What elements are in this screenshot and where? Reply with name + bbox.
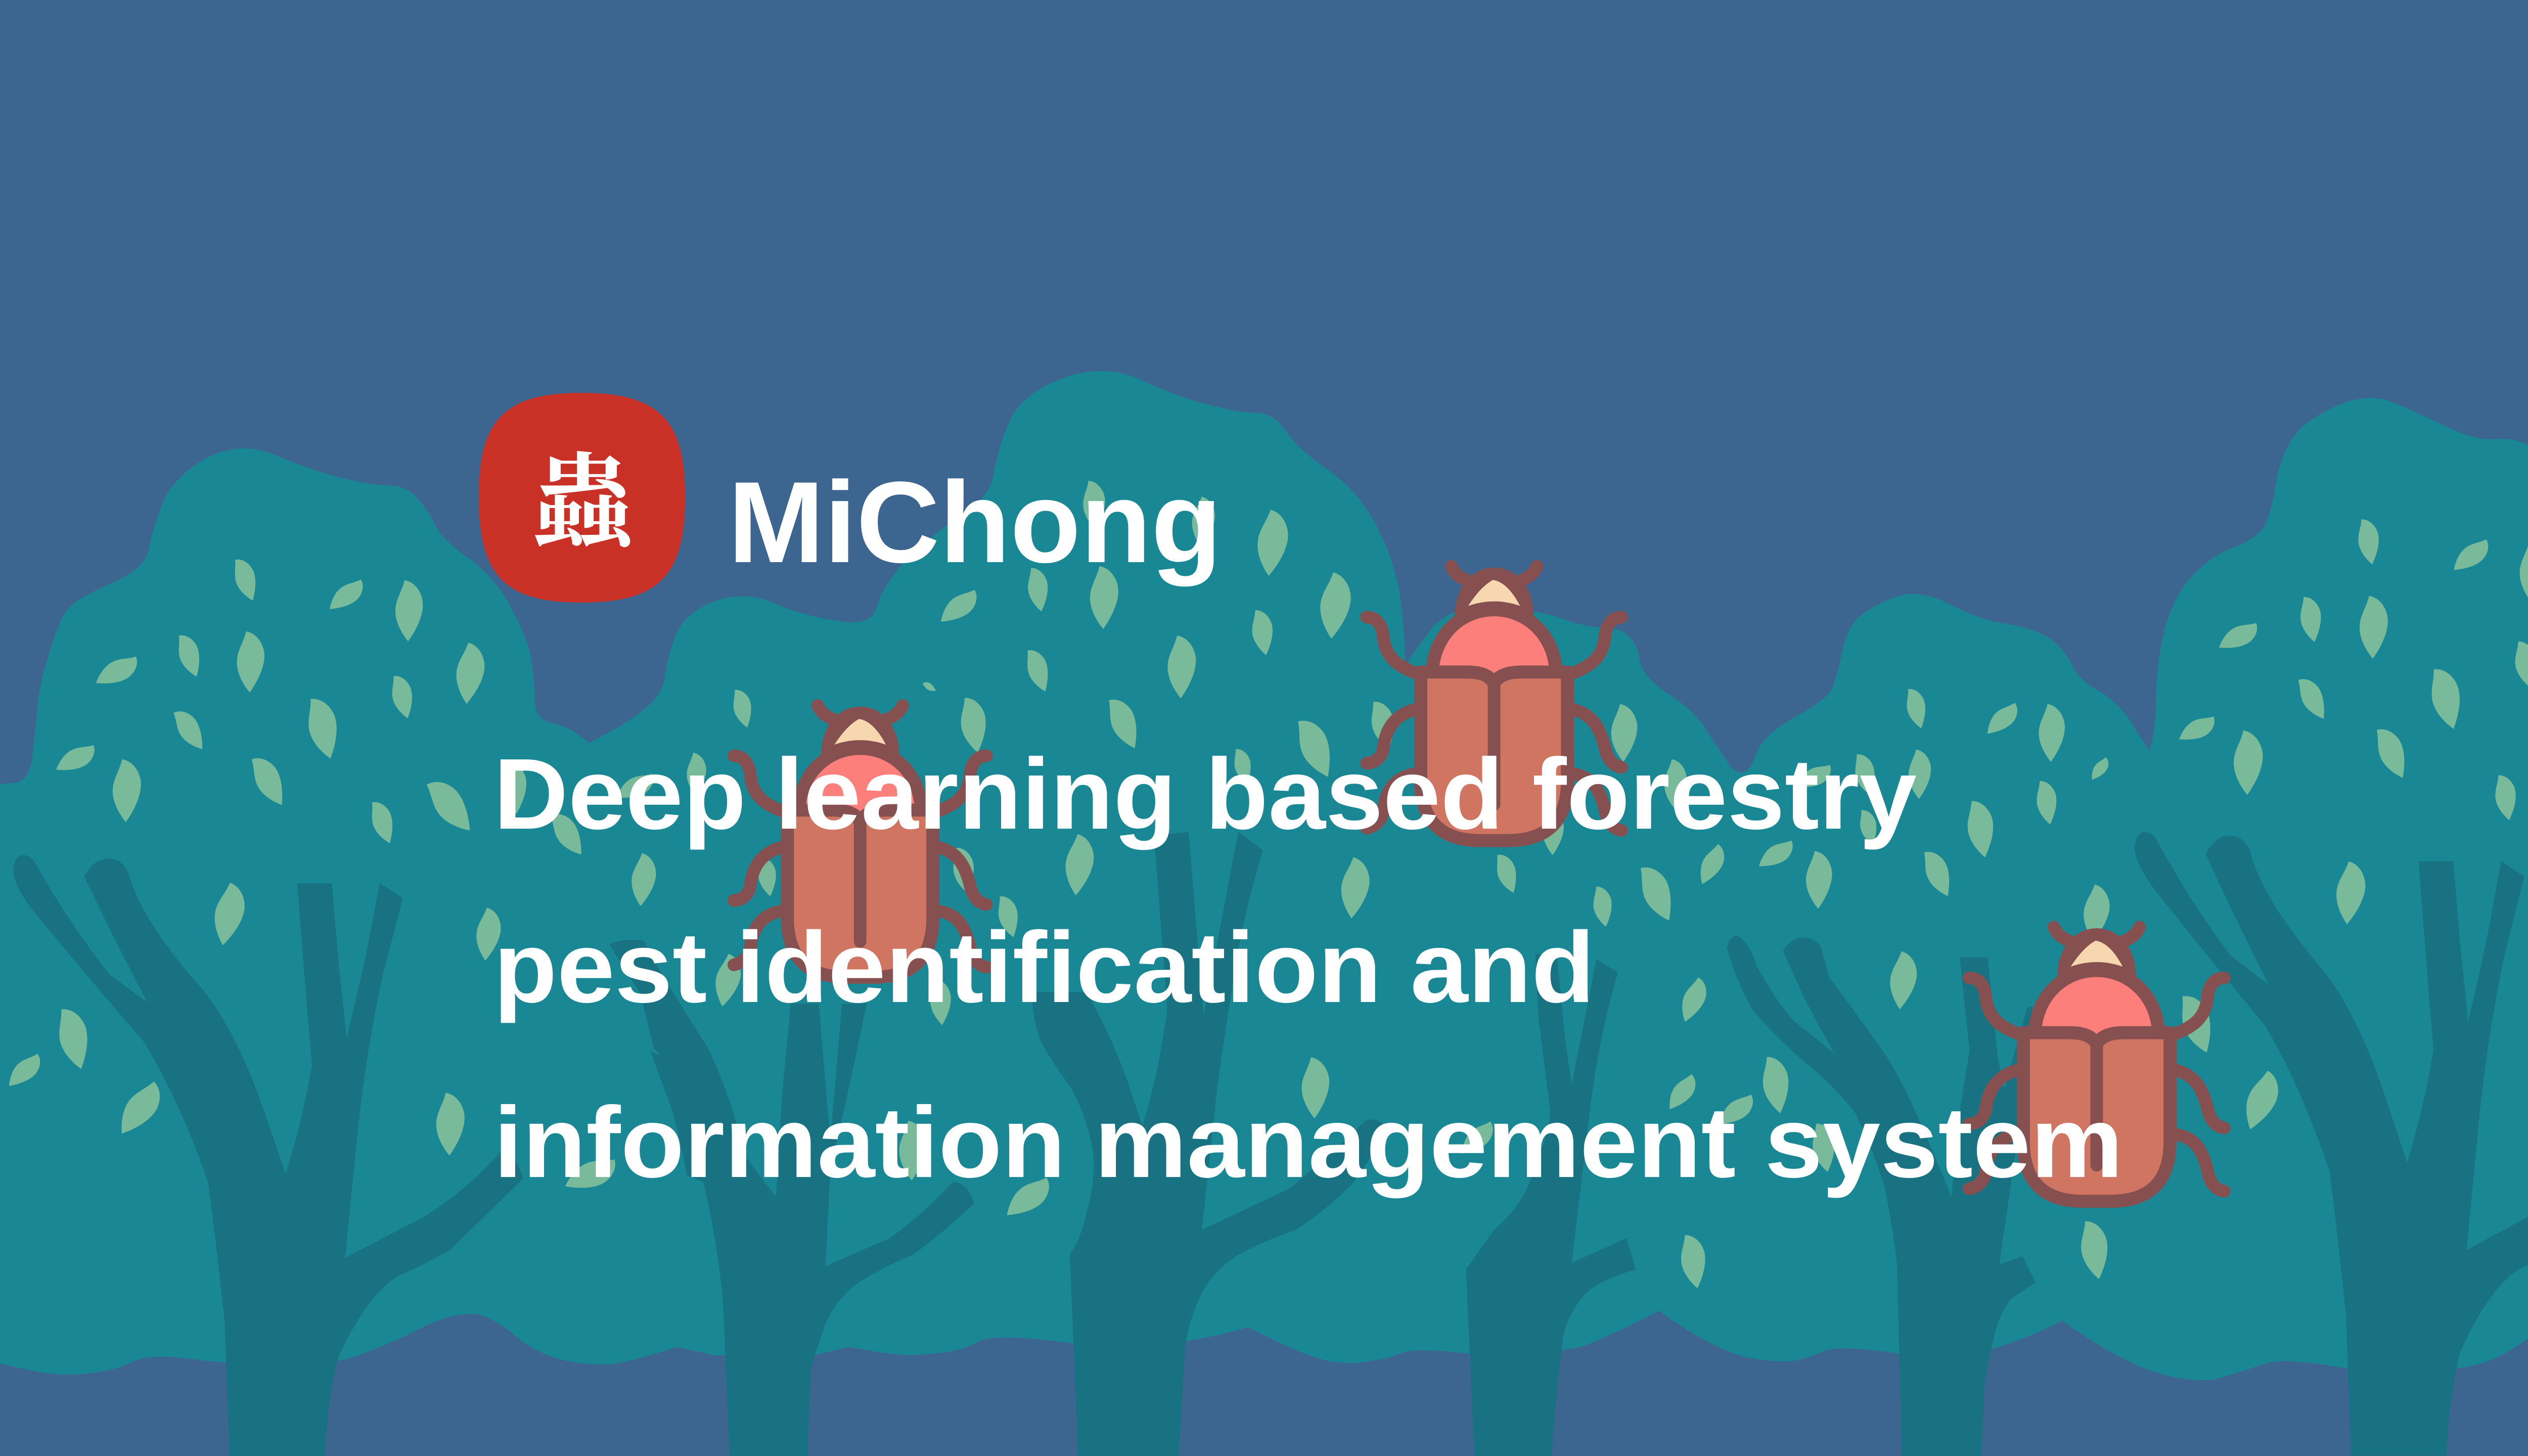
trunk: left tree xyxy=(13,855,523,1456)
leaves: right tree xyxy=(2076,517,2528,1281)
leaves: right-middle trees xyxy=(1492,686,2112,1290)
icon: beetle right xyxy=(1969,927,2224,1201)
icon: beetle centre xyxy=(1367,566,1621,841)
leaves xyxy=(3,480,2528,1290)
trunk: fourth tree xyxy=(1466,954,1636,1456)
tree trunks xyxy=(13,832,2528,1456)
tree crowns xyxy=(0,371,2528,1380)
trunk: second tree xyxy=(609,940,974,1456)
trunk: right tree xyxy=(2135,832,2528,1455)
title text xyxy=(493,738,2123,1199)
app logo xyxy=(479,393,685,603)
leaves: left tree xyxy=(3,555,503,1156)
title line 2: pest identification and xyxy=(493,912,1595,1024)
icon: beetle left xyxy=(734,705,986,977)
trunk: fifth tree xyxy=(1727,936,2047,1456)
trunk: third tree xyxy=(1032,832,1385,1456)
title line 1: Deep learning based forestry xyxy=(493,738,1917,850)
leaves: middle trees xyxy=(501,480,1500,1225)
app logo: 蟲 xyxy=(531,420,640,567)
title line 3: information management system xyxy=(493,1086,2123,1199)
app name: MiChong xyxy=(728,458,1222,587)
